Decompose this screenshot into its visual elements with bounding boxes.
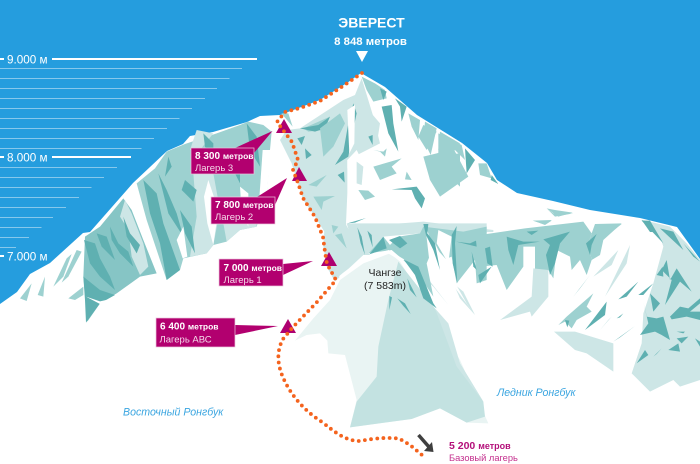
base camp label: Базовый лагерь bbox=[449, 453, 518, 463]
callout: camp 3: Лагерь 3 bbox=[195, 163, 233, 174]
glacier label: East Rongbuk: Восточный Ронгбук bbox=[123, 406, 224, 418]
altitude scale bbox=[0, 54, 257, 264]
climbing route bbox=[277, 73, 422, 455]
camp 2 triangle bbox=[292, 167, 307, 181]
altitude scale: 9.000 м bbox=[7, 54, 48, 66]
Changtse label: (7 583m) bbox=[364, 280, 406, 292]
callout: camp 2 bbox=[211, 178, 287, 224]
callout: camp 1: Лагерь 1 bbox=[224, 275, 262, 286]
icon: summit marker bbox=[356, 51, 368, 62]
camp ABC triangle bbox=[280, 319, 296, 333]
arrow to base camp bbox=[418, 435, 434, 452]
callout: camp 3 bbox=[191, 131, 272, 174]
base camp label bbox=[449, 440, 518, 463]
Rongbuk glacier and right shoulder bbox=[480, 208, 700, 392]
callout: camp ABC: Лагерь АВС bbox=[160, 334, 212, 346]
Changtse label: Чангзе bbox=[369, 267, 402, 279]
callout: camp 1: 7 000 метров bbox=[224, 263, 282, 274]
glacier label: Rongbuk: Ледник Ронгбук bbox=[496, 387, 576, 399]
callout: camp 2: Лагерь 2 bbox=[215, 212, 253, 223]
callout: camp 3: 8 300 метров bbox=[195, 151, 254, 162]
camp 3 triangle bbox=[276, 119, 292, 133]
central Everest face bbox=[280, 77, 460, 257]
base camp label: 5 200 метров bbox=[449, 440, 511, 452]
altitude scale: 7.000 м bbox=[7, 250, 48, 264]
Changtse peak bbox=[295, 220, 495, 427]
right upper face bbox=[357, 125, 670, 232]
camp 1 triangle bbox=[321, 252, 337, 266]
title: Everest: ЭВЕРЕСТ bbox=[338, 14, 405, 30]
callout: camp ABC: 6 400 метров bbox=[160, 322, 218, 332]
callout: camp ABC bbox=[156, 318, 278, 347]
summit height: 8 848 метров bbox=[334, 36, 407, 48]
altitude scale: 8.000 м bbox=[7, 152, 48, 164]
callout: camp 2: 7 800 метров bbox=[215, 200, 274, 211]
left ridge facets bbox=[20, 122, 272, 323]
callout: camp 1 bbox=[219, 259, 313, 286]
